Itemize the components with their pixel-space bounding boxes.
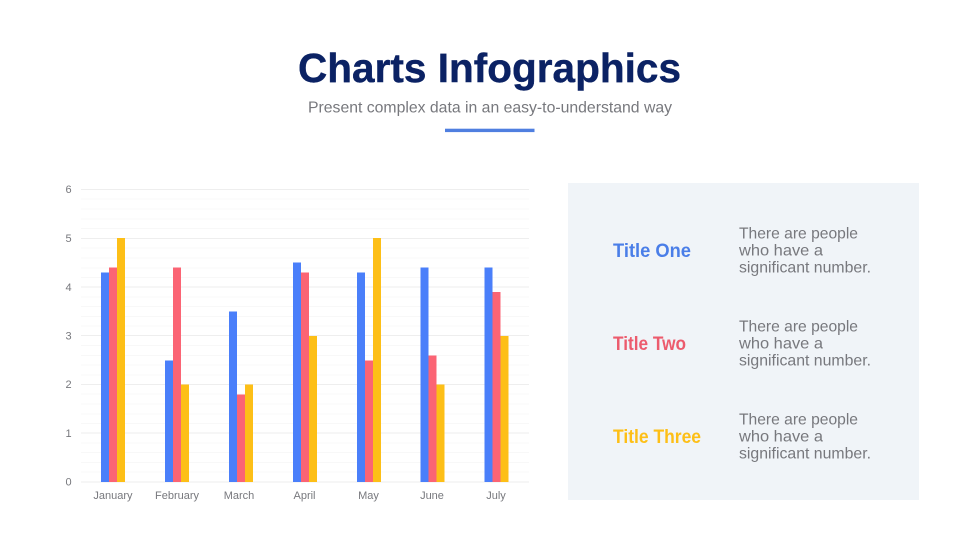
x axis labels: May — [358, 490, 379, 502]
bar chart — [65, 184, 529, 502]
x axis labels: June — [420, 490, 444, 502]
title underline accent — [445, 129, 534, 132]
x axis labels — [93, 490, 506, 502]
legend item two: There are people — [739, 318, 858, 336]
legend item three — [613, 412, 871, 462]
x axis labels: February — [155, 490, 200, 502]
x axis labels: January — [93, 490, 133, 502]
y axis labels: 2 — [65, 379, 72, 391]
red series — [109, 268, 500, 482]
yellow series — [117, 238, 508, 482]
y axis labels: 3 — [65, 330, 72, 342]
legend item three: There are people — [739, 412, 858, 428]
x axis labels: March — [224, 490, 254, 502]
panel: legend — [568, 183, 919, 500]
y axis labels: 4 — [65, 282, 72, 294]
x axis labels: July — [486, 490, 506, 502]
legend item two: significant number. — [739, 352, 871, 370]
y axis labels: 6 — [65, 184, 72, 196]
y axis labels: 1 — [65, 428, 72, 440]
legend item three: significant number. — [739, 446, 871, 462]
legend item one: significant number. — [739, 260, 871, 276]
legend item two: who have a — [738, 336, 823, 352]
title: Charts Infographics — [298, 45, 681, 91]
subtitle: Present complex data in an easy-to-understand way — [308, 100, 672, 116]
blue series — [101, 262, 492, 482]
x axis labels: April — [293, 490, 316, 502]
legend item three: who have a — [738, 428, 823, 446]
legend item one: There are people — [739, 226, 858, 242]
legend item two: Title Two — [613, 334, 686, 355]
legend item one — [613, 226, 871, 276]
legend item three: Title Three — [613, 427, 701, 448]
legend item two — [613, 318, 871, 370]
y axis labels — [65, 184, 72, 488]
y axis labels: 5 — [65, 233, 72, 245]
legend item one: Title One — [613, 241, 691, 262]
legend item one: who have a — [738, 242, 823, 260]
y axis labels: 0 — [65, 476, 72, 488]
